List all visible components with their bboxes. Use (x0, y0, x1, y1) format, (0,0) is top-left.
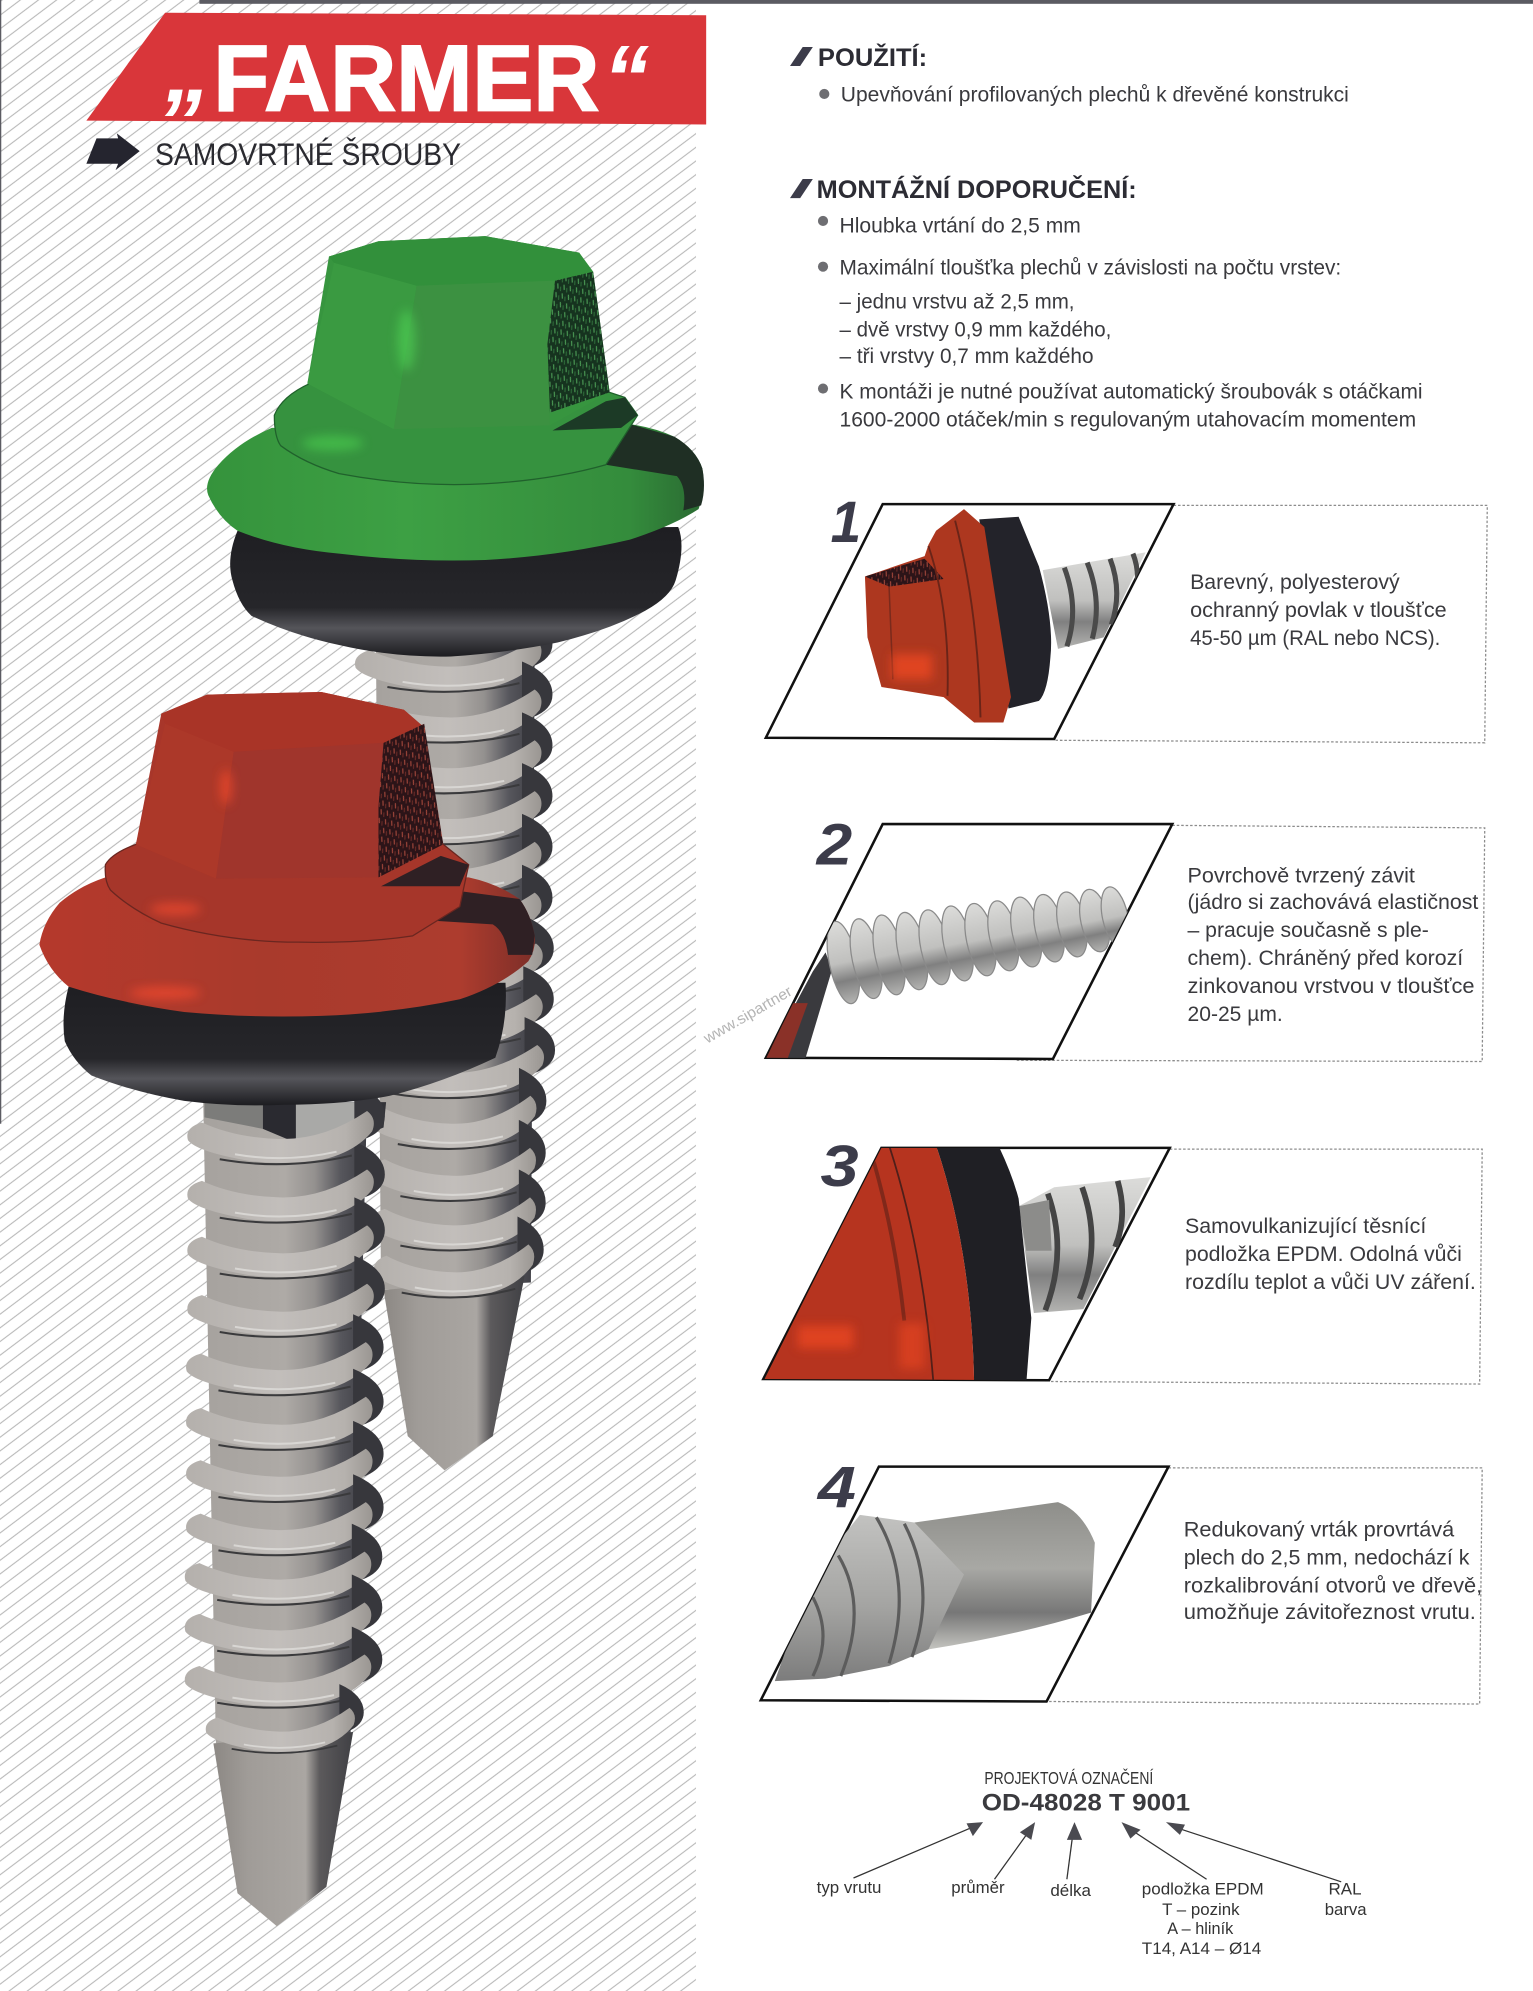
panel 2 text: chem). Chráněný před korozí (1188, 945, 1463, 970)
panel 1 text: Barevný, polyesterový (1190, 569, 1400, 594)
head middle face (216, 743, 384, 879)
bullet: screwdriver: 1600-2000 otáček/min s regulovaným utahovacím momentem (840, 407, 1416, 432)
bullet: screwdriver: K montáži je nutné používat automatický šroubovák s otáčkami (840, 379, 1423, 404)
title banner (86, 13, 706, 130)
label: washer options (1142, 1880, 1264, 1958)
bullet: screwdriver (818, 379, 1423, 432)
label: washer options: T14, A14 – Ø14 (1142, 1940, 1261, 1958)
head top face (329, 236, 593, 286)
label: washer options: A – hliník (1167, 1920, 1234, 1938)
head left face (136, 724, 234, 879)
left edge line (0, 0, 1, 1124)
hatched background panel (0, 0, 696, 1991)
back green screw (207, 236, 704, 1470)
number 3: 3 (820, 1134, 859, 1199)
label: RAL colour: RAL (1329, 1880, 1362, 1898)
panel 2 text: 20-25 µm. (1188, 1001, 1283, 1026)
panel 2 text: – pracuje současně s ple- (1188, 917, 1429, 942)
image frame (763, 1148, 1170, 1380)
panel 2 text (1188, 862, 1478, 1026)
head of red screw (136, 692, 443, 879)
heading text: MONTÁŽNÍ DOPORUČENÍ: (817, 174, 1137, 204)
arrow: length (1067, 1822, 1082, 1879)
head top face (161, 692, 423, 752)
panel 4 text (1184, 1516, 1482, 1624)
panel 4 text: umožňuje závitořeznost vrutu. (1184, 1599, 1476, 1624)
neck of red screw (204, 1102, 386, 1145)
title text: FARMER (213, 25, 599, 130)
panel 3 text: Samovulkanizující těsnící (1185, 1213, 1426, 1238)
label: screw type: typ vrutu (817, 1879, 881, 1897)
project designation heading: PROJEKTOVÁ OZNAČENÍ (984, 1767, 1153, 1788)
section heading: použití (790, 42, 927, 72)
label: washer options: podložka EPDM (1142, 1880, 1264, 1898)
red highlight (220, 769, 232, 805)
panel 1 text: 45-50 µm (RAL nebo NCS). (1190, 625, 1440, 650)
rubber seal of green screw (230, 527, 681, 657)
first thread of red screw (187, 1083, 385, 1164)
panel 2 text: zinkovanou vrstvou v tloušťce (1188, 973, 1475, 998)
close-up: coated head (865, 509, 1146, 722)
image frame (766, 504, 1174, 739)
dashed text box (1016, 825, 1485, 1062)
heading mark (790, 47, 813, 66)
label: RAL colour: barva (1325, 1901, 1367, 1919)
panel 1 text (1190, 569, 1447, 650)
arrow: washer (1121, 1822, 1207, 1879)
close-up: drill tip (775, 1502, 1095, 1681)
speckled head face (547, 272, 610, 413)
green highlight (398, 310, 415, 371)
bullet: maximum sheet thickness (818, 254, 1341, 368)
flange of green screw (274, 383, 638, 485)
washer of green screw (207, 424, 704, 561)
panel 1: coating (766, 490, 1487, 743)
panel 4 text: Redukovaný vrták provrtává (1184, 1516, 1454, 1541)
bullet: maximum sheet thickness: Maximální tloušťka plechů v závislosti na počtu vrstev: (840, 254, 1341, 279)
washer shadow (606, 424, 704, 510)
arrow: screw type (854, 1822, 983, 1878)
washer shadow (432, 890, 535, 955)
panel 1 text: ochranný povlak v tloušťce (1190, 597, 1447, 622)
panel 2: thread (766, 813, 1485, 1062)
watermark: www.sipartner (700, 983, 795, 1048)
subtitle: SAMOVRTNÉ ŠROUBY (155, 136, 461, 172)
washer highlight (130, 987, 201, 999)
arrow: diameter (994, 1822, 1035, 1879)
front red screw (39, 692, 535, 1926)
close-up: thread (766, 884, 1134, 1059)
dashed text box (1049, 1149, 1482, 1384)
heading mark (790, 179, 813, 198)
label: diameter: průměr (951, 1879, 1005, 1897)
project designation code: OD-48028 T 9001 (982, 1790, 1190, 1817)
shaft of red screw (185, 1102, 385, 1926)
image frame (761, 1467, 1168, 1701)
rubber seal of red screw (64, 983, 506, 1105)
panel 3 text (1185, 1213, 1476, 1294)
bullet: maximum sheet thickness: – dvě vrstvy 0,9 mm každého, (840, 316, 1111, 341)
panel 2 text: Povrchově tvrzený závit (1188, 862, 1415, 887)
washer of red screw (39, 877, 535, 1017)
head middle face (394, 281, 555, 429)
flange highlight (150, 903, 201, 916)
tip of red screw (213, 1732, 353, 1926)
panel 3: washer (762, 1134, 1482, 1384)
subtitle arrow icon (86, 133, 140, 170)
head left face (307, 263, 417, 429)
close-up: washer (762, 1145, 1151, 1384)
panel 3 text: podložka EPDM. Odolná vůči (1185, 1241, 1462, 1266)
head of green screw (307, 236, 610, 429)
shaft of green screw (355, 611, 555, 1470)
panel 4 text: rozkalibrování otvorů ve dřevě, (1184, 1572, 1482, 1597)
tip of green screw (384, 1276, 525, 1470)
closing quote: “ (603, 25, 649, 130)
bullet: maximum sheet thickness: – tři vrstvy 0,7 mm každého (840, 343, 1094, 368)
flange of red screw (105, 844, 469, 942)
panel 3 text: rozdílu teplot a vůči UV záření. (1185, 1269, 1476, 1294)
top edge strip (199, 0, 1533, 4)
flange dark wedge (381, 856, 469, 886)
bullet: maximum sheet thickness: – jednu vrstvu až 2,5 mm, (840, 289, 1074, 314)
number 4: 4 (817, 1455, 856, 1520)
heading text: POUŽITÍ: (818, 42, 927, 72)
opening quote: „ (164, 17, 211, 122)
arrow: RAL (1166, 1822, 1341, 1882)
label: washer options: T – pozink (1162, 1901, 1240, 1919)
flange highlight (302, 436, 363, 451)
panel 2 text: (jádro si zachovává elastičnost (1188, 889, 1478, 914)
image frame (766, 824, 1172, 1059)
label: length: délka (1050, 1882, 1092, 1900)
panel 4: drill (761, 1455, 1482, 1704)
label: RAL colour (1325, 1880, 1367, 1919)
bullet: usage: Upevňování profilovaných plechů k dřevěné konstrukci (841, 82, 1349, 107)
flange dark wedge (552, 397, 638, 430)
panel 4 text: plech do 2,5 mm, nedochází k (1184, 1544, 1470, 1569)
section heading: montážní doporučení (790, 174, 1137, 204)
number 2: 2 (816, 813, 852, 878)
speckled head face (378, 724, 443, 877)
dashed text box (1054, 505, 1487, 743)
dashed text box (1047, 1468, 1482, 1704)
number 1: 1 (831, 490, 861, 555)
bullet: drilling depth: Hloubka vrtání do 2,5 mm (840, 212, 1081, 237)
